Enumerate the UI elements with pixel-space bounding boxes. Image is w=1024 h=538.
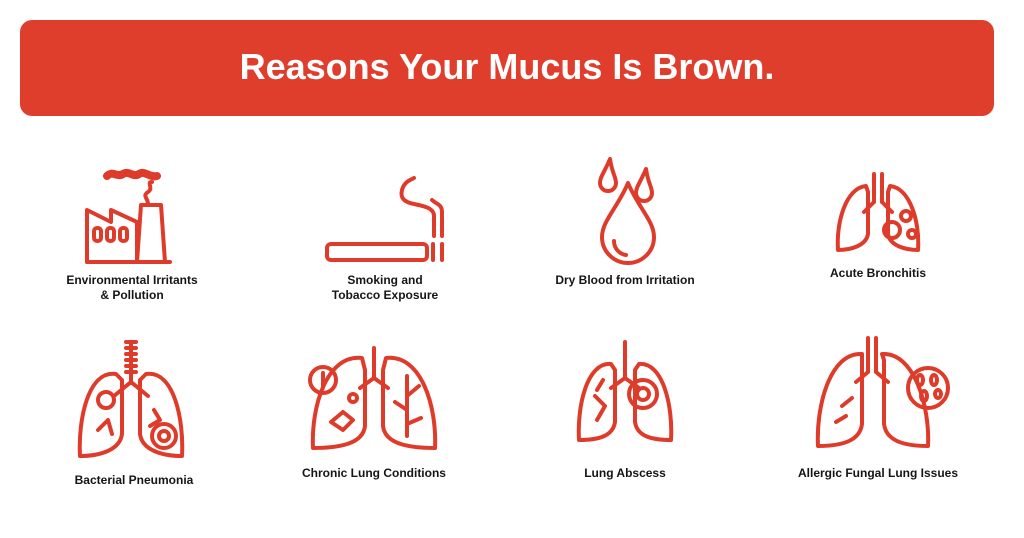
title banner: [20, 20, 994, 116]
label: chronic lung: Chronic Lung Conditions: [302, 466, 446, 480]
label: acute bronchitis: Acute Bronchitis: [830, 266, 926, 280]
label: environmental: & Pollution: [100, 288, 164, 302]
label: bacterial pneumonia: Bacterial Pneumonia: [75, 473, 193, 487]
icon: lung abscess: [576, 340, 674, 442]
icon: fungal lungs: [816, 336, 950, 448]
label: abscess: Lung Abscess: [584, 466, 666, 480]
label: fungal: Allergic Fungal Lung Issues: [798, 466, 958, 480]
icon: cigarette: [325, 176, 444, 262]
label: environmental: [66, 273, 198, 302]
title banner: Reasons Your Mucus Is Brown.: [240, 46, 774, 87]
icon: chronic lungs: [308, 346, 438, 450]
icon: factory: [85, 168, 172, 264]
label: environmental: Environmental Irritants: [66, 273, 198, 287]
label: smoking: [332, 273, 438, 302]
label: smoking: Tobacco Exposure: [332, 288, 438, 302]
label: dry blood: Dry Blood from Irritation: [555, 273, 695, 287]
icon: pneumonia lungs: [78, 340, 184, 458]
icon: bronchitis lungs: [836, 172, 920, 252]
label: smoking: Smoking and: [347, 273, 423, 287]
icon: blood drops: [598, 157, 656, 265]
